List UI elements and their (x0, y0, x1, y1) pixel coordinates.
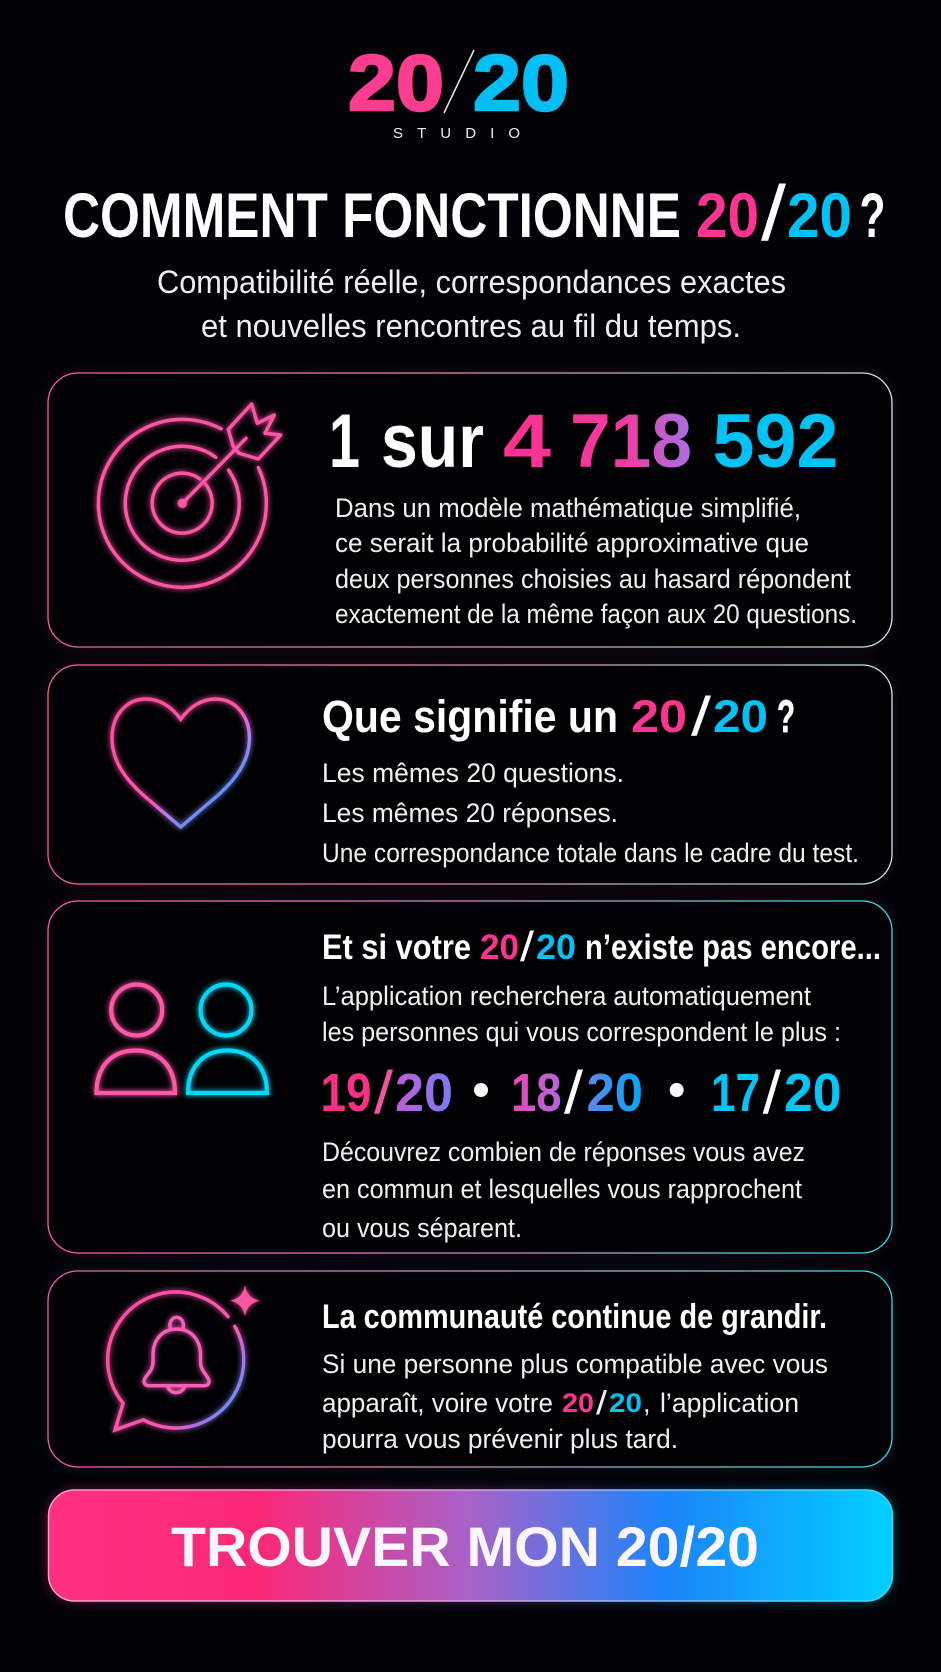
button: Trouver mon 20/20 (48, 1490, 892, 1601)
text block: probability explanation: deux personnes choisies au hasard répondent (335, 564, 851, 594)
heading: 20 (631, 691, 687, 742)
logo: 20/20 Studio: STUDIO (393, 125, 520, 142)
heading: La communauté continue de grandir. (322, 1298, 827, 1336)
title: 20 (787, 181, 852, 251)
text block: discover answers: Découvrez combien de réponses vous avez (322, 1137, 805, 1167)
text block: discover answers (322, 1137, 805, 1243)
text block: probability explanation: exactement de la même façon aux 20 questions. (335, 599, 857, 629)
icon: bell in speech bubble (108, 1285, 260, 1430)
text block: notification (322, 1349, 828, 1454)
text block: meaning: Les mêmes 20 questions. (322, 758, 624, 788)
text block: meaning (322, 758, 859, 868)
scores: 19/20, 18/20, 17/20: 20 (395, 1063, 453, 1123)
heading: / (520, 923, 534, 970)
stat: 1 sur 4 718 592: 718 (570, 399, 692, 484)
stat: 1 sur 4 718 592: 4 (503, 399, 551, 484)
text block: notification: Si une personne plus compatible avec vous (322, 1349, 828, 1379)
text block: notification: l’application (660, 1388, 799, 1418)
scores: 19/20, 18/20, 17/20: 19 (320, 1063, 372, 1123)
panel: near matches (48, 901, 892, 1253)
icon: two people (96, 984, 267, 1093)
heading (322, 685, 795, 747)
scores: 19/20, 18/20, 17/20: 20 (784, 1063, 842, 1123)
title: ? (860, 181, 886, 251)
scores: 19/20, 18/20, 17/20: 18 (511, 1063, 562, 1123)
heading: n’existe pas encore... (585, 928, 881, 967)
heading: / (691, 685, 712, 747)
heading (322, 923, 881, 970)
logo: 20/20 Studio (348, 38, 569, 142)
text block: notification: 20 (609, 1388, 642, 1418)
panel: probability (48, 373, 892, 647)
stat: 1 sur 4 718 592 (329, 399, 838, 484)
panel: growing community (48, 1271, 892, 1467)
stat: 1 sur 4 718 592: 592 (712, 399, 838, 484)
subtitle: et nouvelles rencontres au fil du temps. (201, 308, 741, 344)
text block: meaning: Une correspondance totale dans le cadre du test. (322, 838, 859, 868)
subtitle (157, 264, 786, 344)
panel: meaning of 20/20 (48, 665, 892, 884)
text block: automatic search: les personnes qui vous correspondent le plus : (322, 1017, 841, 1047)
title: / (761, 169, 786, 257)
text block: automatic search (322, 981, 841, 1047)
heading: ? (777, 691, 795, 742)
heading: Que signifie un (322, 691, 618, 742)
button: Trouver mon 20/20: TROUVER MON 20/20 (171, 1515, 759, 1578)
text block: probability explanation: ce serait la probabilité approximative que (335, 528, 809, 558)
icon: target with arrow (98, 404, 281, 587)
heading: 20 (480, 928, 519, 967)
text block: notification: apparaît, voire votre (322, 1388, 553, 1418)
text block: meaning: Les mêmes 20 réponses. (322, 798, 618, 828)
scores: 19/20, 18/20, 17/20: / (763, 1059, 781, 1126)
icon: heart (112, 699, 249, 827)
title: 20 (696, 181, 759, 251)
text block: notification: / (596, 1384, 608, 1421)
subtitle: Compatibilité réelle, correspondances exactes (157, 264, 786, 300)
stat: 1 sur 4 718 592: sur (381, 399, 484, 484)
heading: 20 (713, 691, 768, 742)
scores: 19/20, 18/20, 17/20: / (564, 1059, 583, 1126)
heading: Et si votre (322, 928, 471, 967)
text block: notification: pourra vous prévenir plus tard. (322, 1424, 678, 1454)
scores: 19/20, 18/20, 17/20: 20 (586, 1063, 643, 1123)
heading: 20 (536, 928, 576, 967)
text block: probability explanation (335, 493, 857, 629)
text block: discover answers: en commun et lesquelles vous rapprochent (322, 1174, 802, 1204)
logo: 20/20 Studio: 20 (348, 38, 444, 127)
scores: 19/20, 18/20, 17/20 (320, 1059, 842, 1126)
text block: automatic search: L’application recherchera automatiquement (322, 981, 811, 1011)
scores: 19/20, 18/20, 17/20: 17 (711, 1063, 760, 1123)
logo: 20/20 Studio: 20 (473, 38, 569, 127)
scores: 19/20, 18/20, 17/20: / (374, 1059, 393, 1126)
text block: notification: , (643, 1388, 651, 1418)
text block: probability explanation: Dans un modèle mathématique simplifié, (335, 493, 801, 523)
text block: discover answers: ou vous séparent. (322, 1213, 522, 1243)
title: COMMENT FONCTIONNE (63, 181, 681, 251)
stat: 1 sur 4 718 592: 1 (329, 399, 360, 484)
text block: notification: 20 (562, 1388, 594, 1418)
